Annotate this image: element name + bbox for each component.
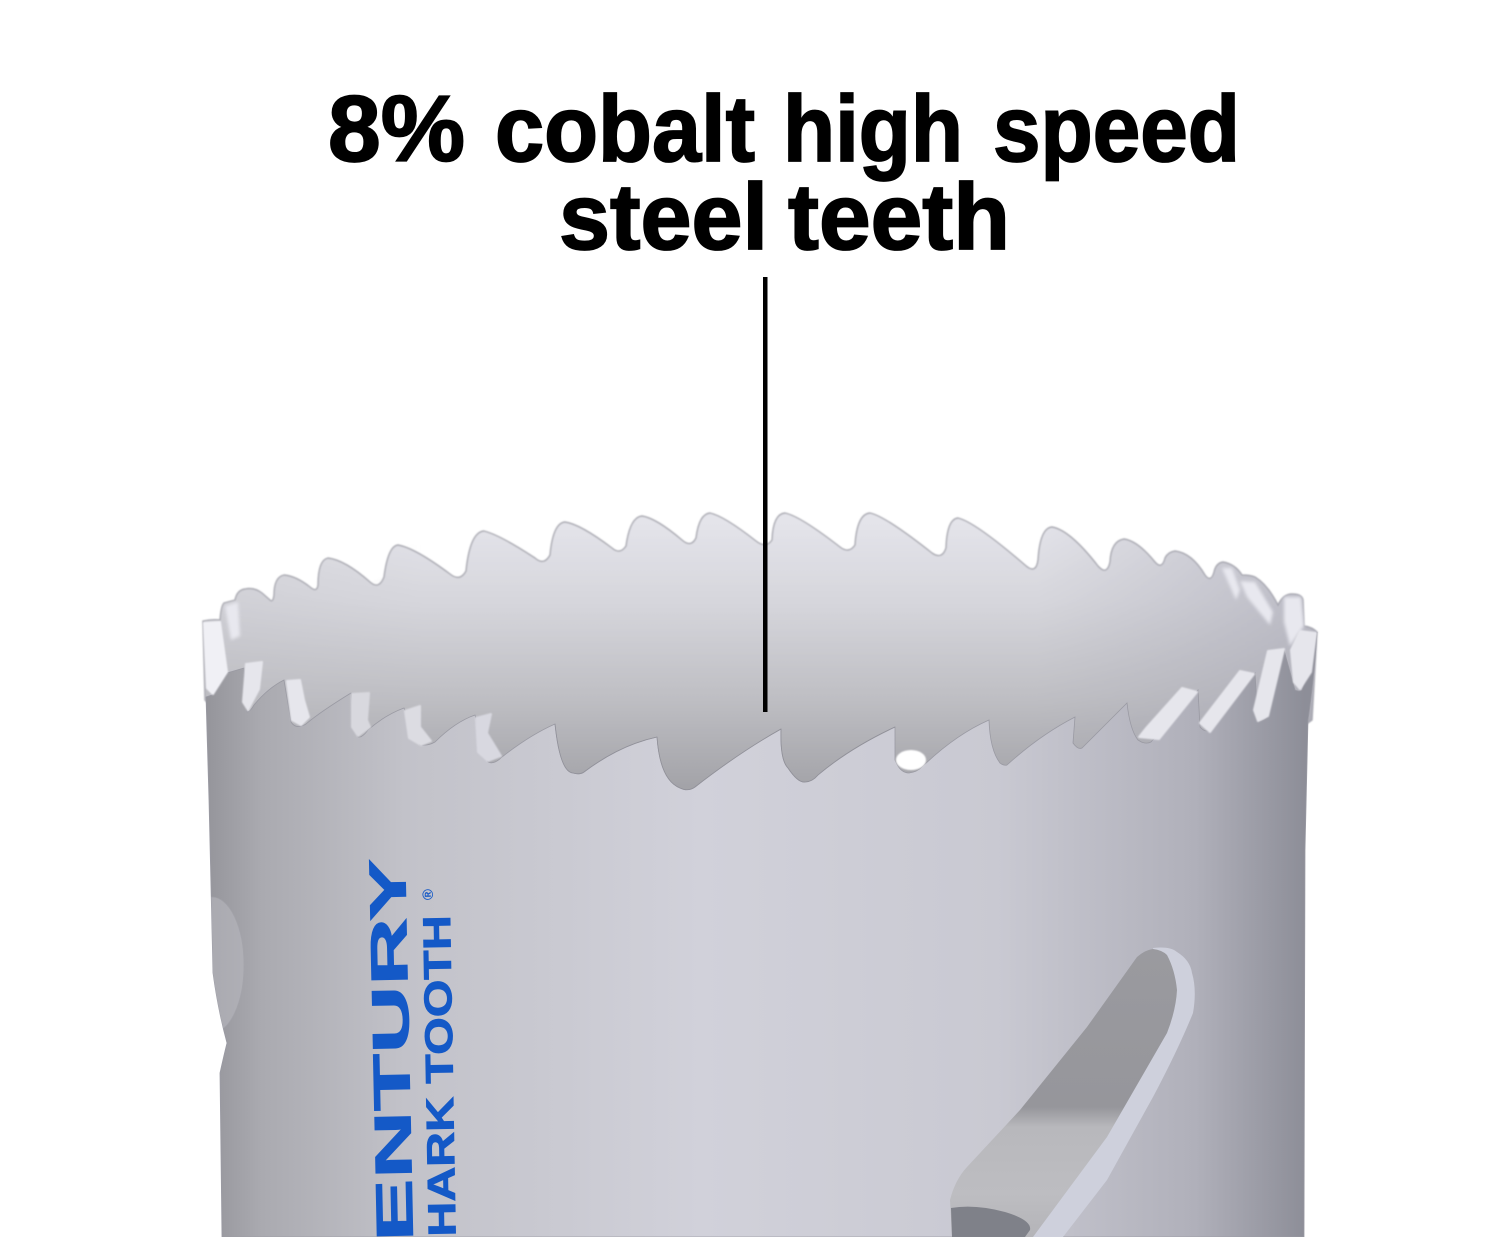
hole saw illustration <box>180 513 1317 1237</box>
front teeth highlights <box>204 622 1316 761</box>
blue brand text <box>359 858 464 1237</box>
title: steel <box>559 164 768 269</box>
slot opening <box>950 949 1177 1237</box>
title: 8% <box>328 76 465 181</box>
blue brand text: HARK TOOTH <box>415 915 464 1237</box>
slot cut-out <box>950 948 1195 1237</box>
title: teeth <box>788 164 1010 269</box>
slot bevel <box>1030 948 1195 1237</box>
infographic canvas <box>202 92 1318 1237</box>
hole through the front wall <box>896 750 926 770</box>
title: cobalt <box>495 76 755 181</box>
title: high <box>783 76 963 181</box>
outer body of the saw <box>206 632 1317 1237</box>
title: speed <box>993 76 1240 181</box>
left side bump <box>211 897 244 1028</box>
gullet outlines on front teeth <box>555 724 895 790</box>
inner wall with back teeth <box>203 513 1317 800</box>
pointer line <box>763 277 768 712</box>
title <box>328 76 1240 269</box>
dark floor shadow <box>951 1207 1030 1237</box>
blue brand text: ENTURY <box>359 858 425 1237</box>
blue brand text: ® <box>420 889 437 900</box>
back teeth highlights <box>225 568 1304 646</box>
